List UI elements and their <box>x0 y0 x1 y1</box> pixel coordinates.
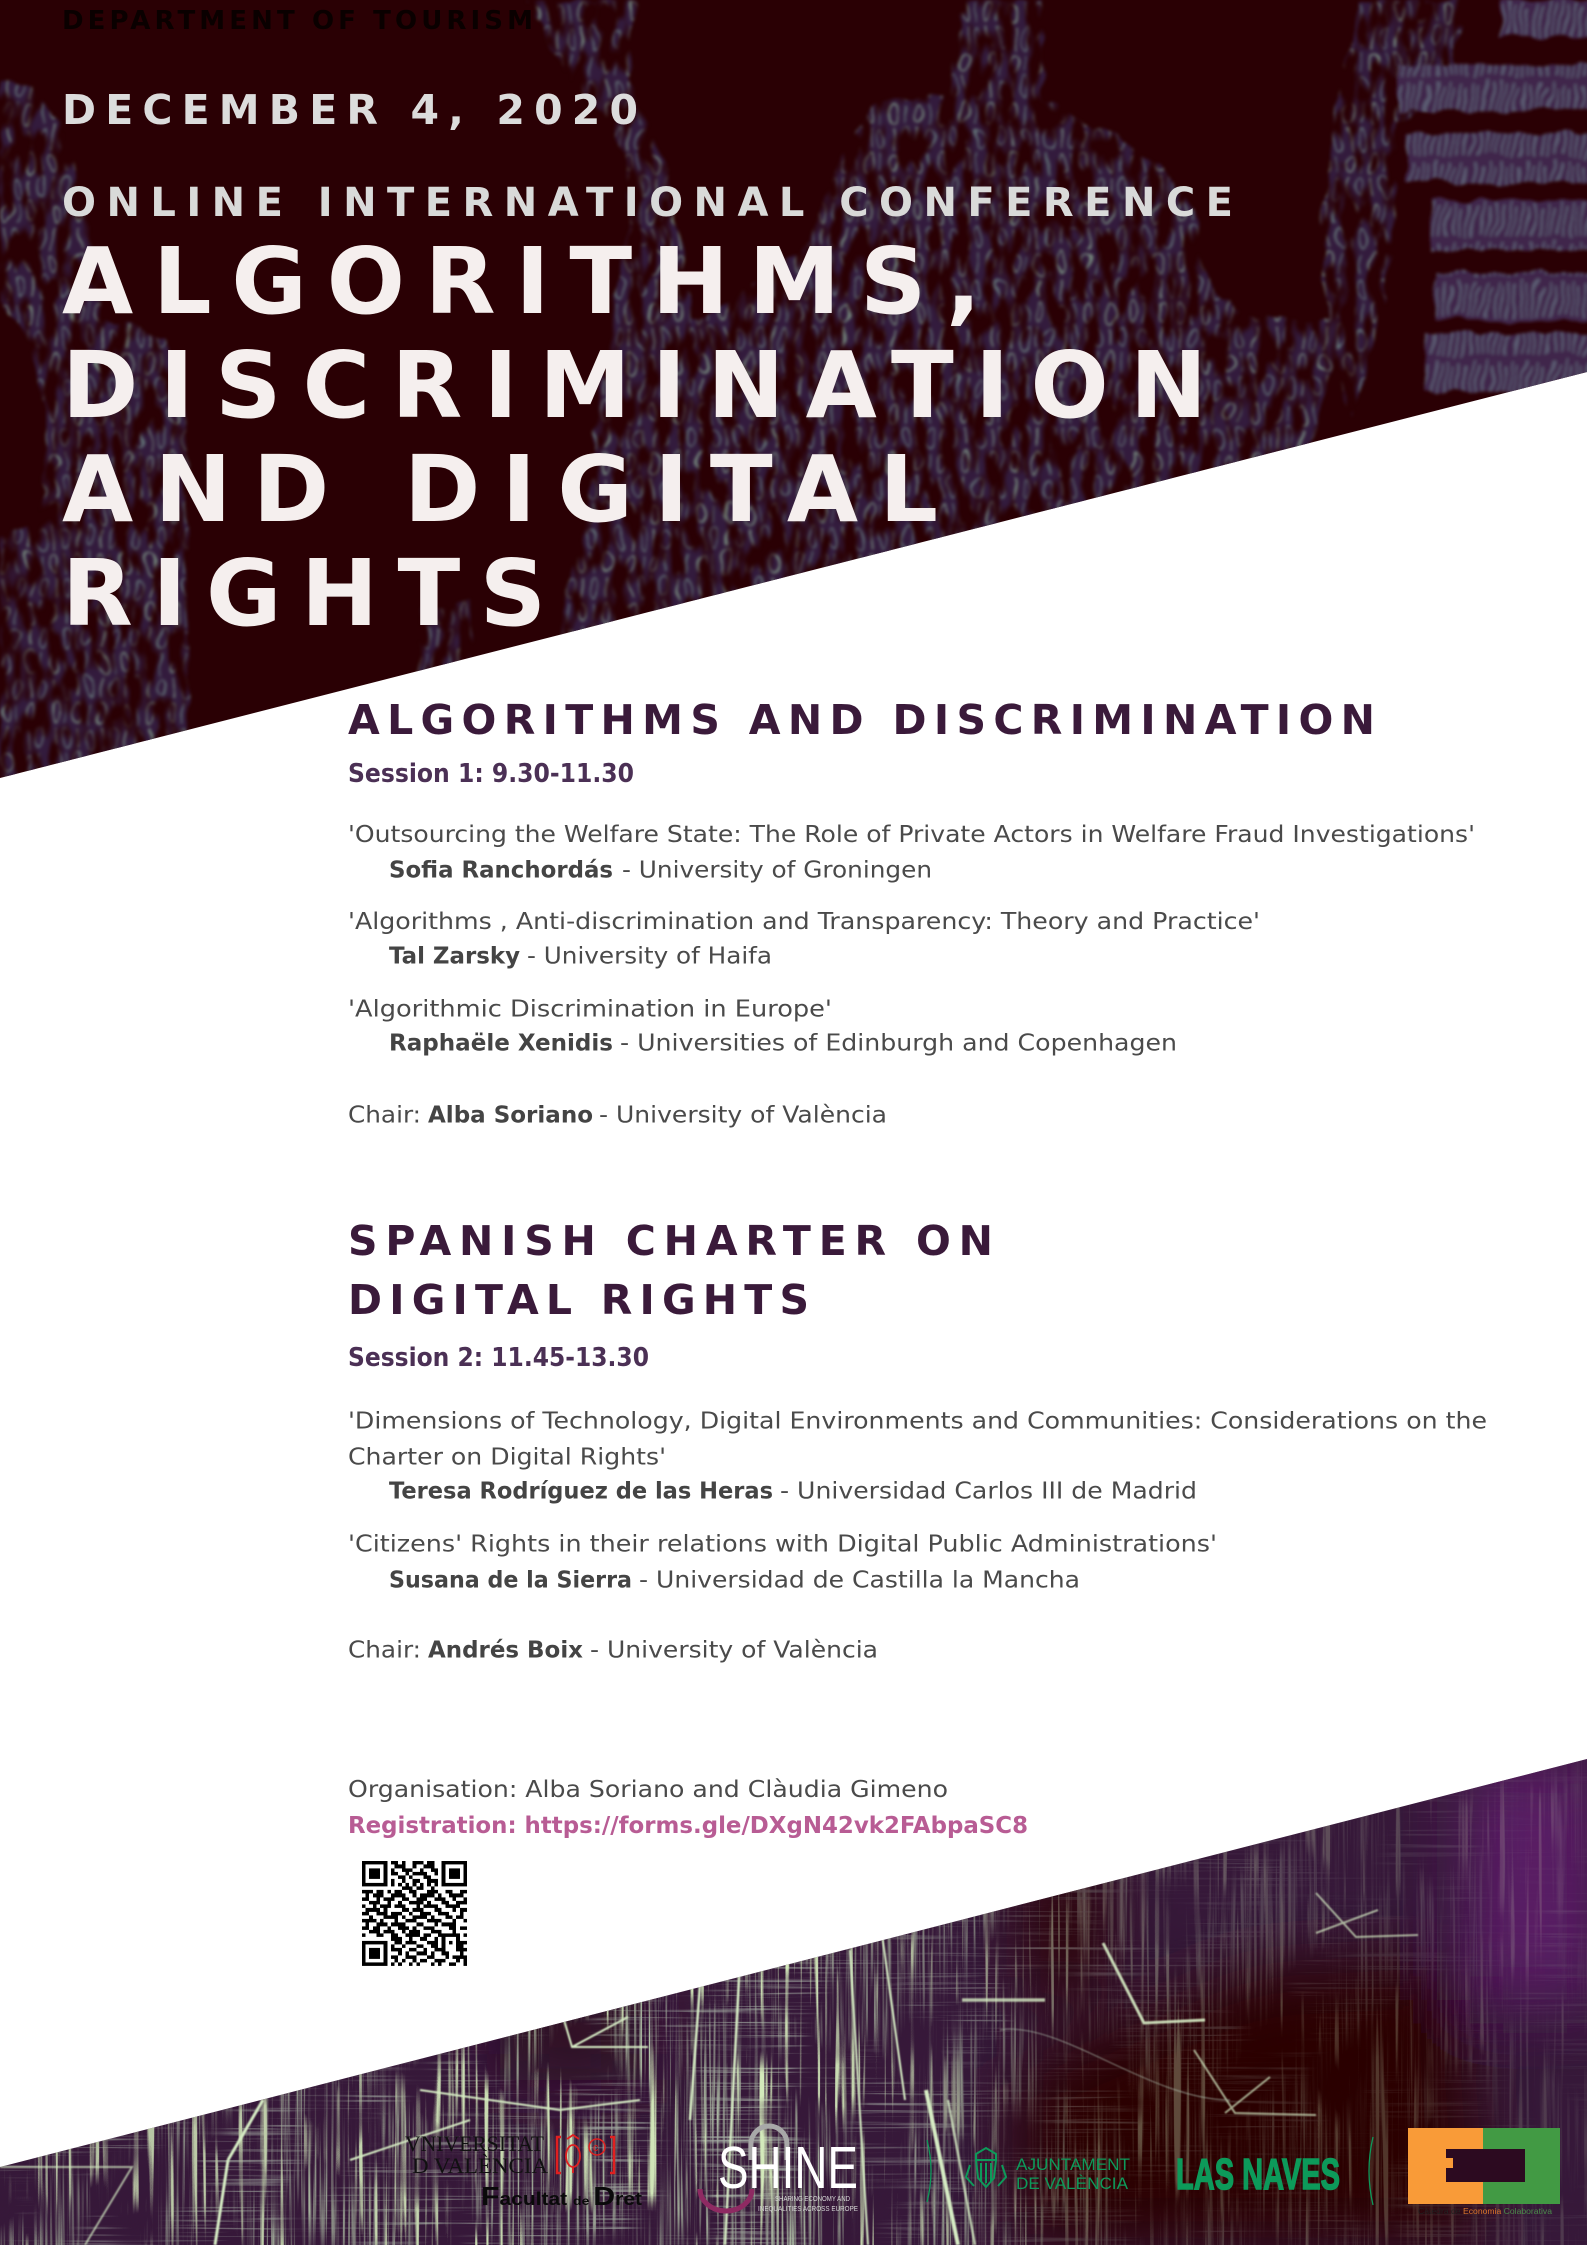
conference label: ONLINE INTERNATIONAL CONFERENCE <box>62 180 1233 226</box>
logo: SHINE <box>700 2126 858 2213</box>
main title <box>62 228 1207 647</box>
speaker 1: Sofia Ranchordás <box>389 858 613 884</box>
session 2 time: Session 2: 11.45-13.30 <box>348 1343 649 1373</box>
talk 4: 'Dimensions of Technology, Digital Environments and Communities: Considerations on the <box>348 1408 1487 1434</box>
speaker 2: - University of Haifa <box>527 944 772 970</box>
main title: DISCRIMINATION <box>62 332 1207 439</box>
department label: DEPARTMENT OF TOURISM <box>62 6 533 36</box>
logo: Ajuntament de València <box>966 2148 1130 2193</box>
heading: spanish charter on digital rights <box>348 1217 993 1324</box>
talk 4: Charter on Digital Rights' <box>348 1444 666 1470</box>
talk 1: 'Outsourcing the Welfare State: The Role of Private Actors in Welfare Fraud Investigations' <box>348 822 1475 848</box>
logo: Ajuntament de València: DE VALÈNCIA <box>1016 2174 1129 2193</box>
speaker 5 <box>389 1568 1080 1594</box>
heading: spanish charter on digital rights: SPANISH CHARTER ON <box>348 1217 993 1265</box>
divider arc left <box>927 2140 931 2202</box>
chair session 1 <box>348 1102 887 1128</box>
panel: session 1 <box>348 696 1475 1128</box>
chair session 2 <box>348 1638 878 1664</box>
chair session 1: Chair: <box>348 1102 421 1128</box>
speaker 1: - University of Groningen <box>622 858 932 884</box>
speaker 2 <box>389 944 772 970</box>
chair session 2: - University of València <box>590 1638 878 1664</box>
speaker 5: - Universidad de Castilla la Mancha <box>639 1568 1080 1594</box>
divider arc right <box>1369 2137 1373 2205</box>
talk 2: 'Algorithms , Anti-discrimination and Transparency: Theory and Practice' <box>348 909 1260 935</box>
panel: session 2 <box>348 1217 1487 1664</box>
logo: Ajuntament de València: AJUNTAMENT <box>1016 2155 1130 2174</box>
main title: RIGHTS <box>62 540 546 647</box>
panel: top header background with binary digits <box>0 0 1587 780</box>
chair session 1: - University of València <box>599 1102 887 1128</box>
logo: Universitat de València, Facultat de Dret: VNIVERSITAT <box>405 2131 545 2156</box>
logo: Las Naves: LAS NAVES <box>1176 2150 1340 2199</box>
speaker 4 <box>389 1478 1197 1504</box>
speaker 4: Teresa Rodríguez de las Heras <box>389 1478 773 1504</box>
speaker 1 <box>389 858 932 884</box>
speaker 5: Susana de la Sierra <box>389 1568 632 1594</box>
logo: Universitat de València, Facultat de Dret: Facultat de Dret <box>481 2181 642 2211</box>
registration link: Registration: https://forms.gle/DXgN42vk2FAbpaSC8 <box>348 1813 1028 1839</box>
logo: Càtedra de Economia Colaborativa <box>1408 2128 1560 2216</box>
logo: Universitat de València, Facultat de Dret: D VALÈNCIA <box>412 2153 548 2178</box>
talk 4 <box>348 1408 1487 1470</box>
icon: QR code <box>362 1861 467 1966</box>
session 1 time: Session 1: 9.30-11.30 <box>348 759 634 789</box>
speaker 3 <box>389 1030 1177 1056</box>
logo: Càtedra de Economia Colaborativa: Càtedra de Economia Colaborativa <box>1418 2207 1553 2216</box>
speaker 4: - Universidad Carlos III de Madrid <box>780 1478 1197 1504</box>
talk 3: 'Algorithmic Discrimination in Europe' <box>348 996 832 1022</box>
speaker 3: - Universities of Edinburgh and Copenhagen <box>620 1030 1177 1056</box>
speaker 2: Tal Zarsky <box>389 944 520 970</box>
chair session 1: Alba Soriano <box>428 1102 593 1128</box>
speaker 3: Raphaële Xenidis <box>389 1030 613 1056</box>
talk 5: 'Citizens' Rights in their relations with Digital Public Administrations' <box>348 1532 1217 1558</box>
chair session 2: Andrés Boix <box>428 1638 583 1664</box>
logo: Universitat de València, Facultat de Dret <box>405 2131 642 2211</box>
logo: SHINE: SHARING ECONOMY AND <box>775 2194 850 2203</box>
main title: AND DIGITAL <box>62 436 938 543</box>
panel: bottom footer background with circuit lines <box>0 1750 1587 2245</box>
main title: ALGORITHMS, <box>62 228 981 335</box>
chair session 2: Chair: <box>348 1638 421 1664</box>
logo: Universitat de València, Facultat de Dret: c <box>593 2142 599 2154</box>
logo: SHINE: SHINE <box>718 2135 858 2201</box>
heading: spanish charter on digital rights: DIGITAL RIGHTS <box>348 1276 809 1324</box>
logo: SHINE: INEQUALITIES ACROSS EUROPE <box>758 2204 858 2213</box>
date: DECEMBER 4, 2020 <box>62 86 638 134</box>
heading: algorithms and discrimination: ALGORITHMS AND DISCRIMINATION <box>348 696 1375 744</box>
organisation: Organisation: Alba Soriano and Clàudia Gimeno <box>348 1777 948 1803</box>
